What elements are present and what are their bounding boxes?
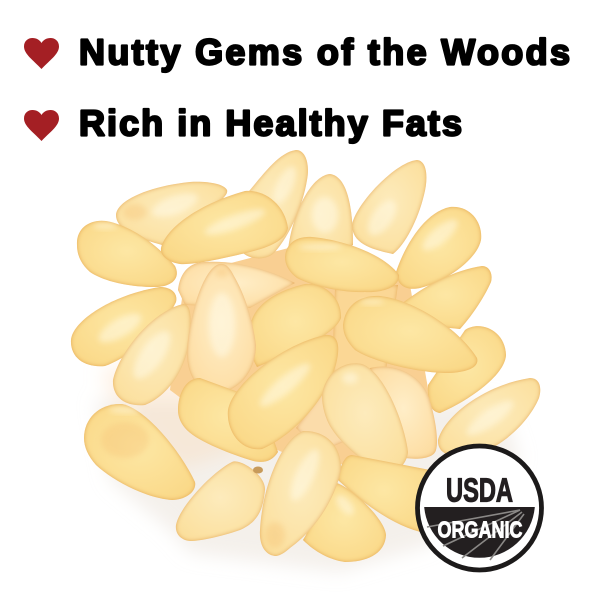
pine nut — [161, 191, 288, 264]
soft shadows under the pile — [95, 350, 520, 572]
pine nut — [187, 264, 256, 393]
pine nut — [400, 266, 492, 329]
pine nut — [338, 455, 430, 533]
pine nut — [77, 221, 177, 287]
USDA Organic badge — [418, 446, 542, 570]
pine nut — [428, 326, 506, 413]
badge: USDA text: USDA — [446, 472, 513, 508]
pine nut — [288, 174, 353, 262]
pine nut — [438, 378, 540, 456]
pine nut — [250, 284, 341, 367]
heart icon: second bullet — [24, 110, 59, 141]
pine nut — [228, 335, 338, 449]
badge: ORGANIC text: ORGANIC — [438, 516, 522, 542]
pine nut — [71, 287, 176, 366]
pine nut — [343, 296, 477, 373]
pine nut — [352, 160, 426, 254]
pine nut — [396, 207, 481, 289]
pine nut — [176, 461, 265, 541]
pine nut — [260, 431, 341, 556]
pine nut — [178, 378, 278, 462]
pine nut — [322, 363, 408, 473]
warm fill between nuts — [170, 245, 430, 470]
pine nut — [303, 483, 386, 562]
heading: Nutty Gems of the Woods: Nutty Gems of the Woods — [79, 32, 570, 72]
pine nut pile — [71, 150, 540, 562]
pine nut — [116, 182, 227, 245]
pine nut — [84, 404, 195, 500]
pine nut — [113, 304, 191, 405]
heart icon: first bullet — [24, 38, 59, 69]
badge: field rays — [427, 510, 524, 560]
pine nut — [285, 237, 399, 292]
pine nut — [370, 367, 437, 459]
heading: Rich in Healthy Fats: Rich in Healthy Fats — [79, 102, 462, 144]
pine nut — [296, 388, 348, 452]
pine nut — [178, 262, 295, 308]
pine nut — [332, 285, 398, 378]
badge: lower black segment — [424, 507, 535, 558]
pine nut — [239, 150, 308, 258]
